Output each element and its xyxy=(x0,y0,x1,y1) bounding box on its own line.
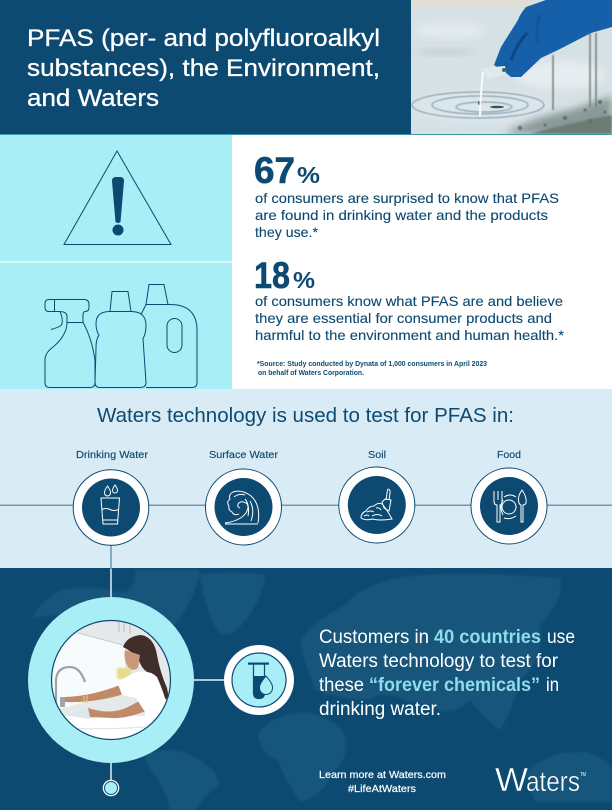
callout text: “forever chemicals” xyxy=(369,675,540,696)
panel: statistics xyxy=(254,150,565,377)
panel: alert icons xyxy=(0,135,232,389)
item: food: Food xyxy=(497,449,521,461)
Waters logo: aters xyxy=(526,766,580,798)
stat: 67 percent: are found in drinking water and the products xyxy=(255,207,548,223)
Waters logo: W xyxy=(495,761,529,798)
item: surface water xyxy=(206,449,282,545)
vial held in fingers xyxy=(482,66,506,79)
item: soil xyxy=(339,449,415,543)
callout text: use xyxy=(547,627,575,648)
learn more links: #LifeAtWaters xyxy=(348,783,416,795)
title: and Waters xyxy=(27,85,159,112)
icon: plate and cutlery xyxy=(494,490,526,522)
stat: 67 percent xyxy=(254,150,559,240)
icon: wave xyxy=(225,491,259,524)
icon: test tube with drop xyxy=(224,645,294,715)
callout text: 40 countries xyxy=(434,627,541,648)
stat: 18 percent: 18 xyxy=(254,255,290,296)
source note xyxy=(257,361,487,377)
falling water xyxy=(480,72,483,116)
stat: 18 percent: of consumers know what PFAS are and believe xyxy=(255,293,563,309)
item: surface water: Surface Water xyxy=(209,449,279,461)
stems xyxy=(553,33,596,110)
stat: 67 percent: they use.* xyxy=(255,224,319,240)
icon: glass and drops xyxy=(101,485,120,524)
icon: warning triangle xyxy=(64,151,171,244)
callout text xyxy=(319,627,575,720)
item: soil: Soil xyxy=(368,449,386,461)
item: drinking water xyxy=(73,449,149,545)
icon: soil and trowel xyxy=(361,489,392,520)
source note: on behalf of Waters Corporation. xyxy=(258,370,364,377)
large circle with photo of girl at sink xyxy=(28,597,194,763)
world map background xyxy=(32,570,612,810)
panel: header xyxy=(0,0,612,135)
stat: 67 percent: % xyxy=(297,162,320,188)
stat: 67 percent: of consumers are surprised to know that PFAS xyxy=(255,190,559,206)
callout text: these xyxy=(319,675,364,696)
panel: customers around the world xyxy=(0,569,612,810)
timeline end dot xyxy=(103,780,119,796)
heading: Waters technology is used to test for PFAS in: xyxy=(97,404,514,427)
face xyxy=(124,650,140,670)
stat: 67 percent: 67 xyxy=(254,150,295,191)
source note: *Source: Study conducted by Dynata of 1,000 consumers in April 2023 xyxy=(257,361,487,368)
callout text: Customers in xyxy=(319,627,429,648)
title xyxy=(27,25,380,112)
tap xyxy=(56,667,85,704)
learn more links: Learn more at Waters.com xyxy=(319,769,446,781)
panel: what Waters tests xyxy=(0,389,612,570)
item: drinking water: Drinking Water xyxy=(76,449,149,461)
speckled shoreline xyxy=(504,96,612,134)
learn more links xyxy=(319,769,446,795)
title: PFAS (per- and polyfluoroalkyl xyxy=(27,25,380,52)
callout text: in xyxy=(546,675,559,696)
shirt xyxy=(118,672,166,727)
stat: 18 percent: % xyxy=(293,267,315,293)
icon: household bottles xyxy=(45,284,197,388)
stat: 18 percent: they are essential for consumer products and xyxy=(255,310,552,326)
header photo: gloved hand over water xyxy=(410,0,612,134)
callout text: drinking water. xyxy=(319,699,441,720)
Waters logo: TM xyxy=(580,772,586,778)
item: food xyxy=(471,449,547,544)
glove xyxy=(494,0,612,77)
hair back xyxy=(123,635,169,700)
stat: 18 percent: harmful to the environment and human health.* xyxy=(255,327,565,343)
stat: 18 percent xyxy=(254,255,565,343)
arms xyxy=(65,685,124,702)
title: substances), the Environment, xyxy=(27,55,380,82)
callout text: Waters technology to test for xyxy=(319,651,559,672)
Waters logo xyxy=(495,761,586,798)
connector lines xyxy=(110,569,225,780)
